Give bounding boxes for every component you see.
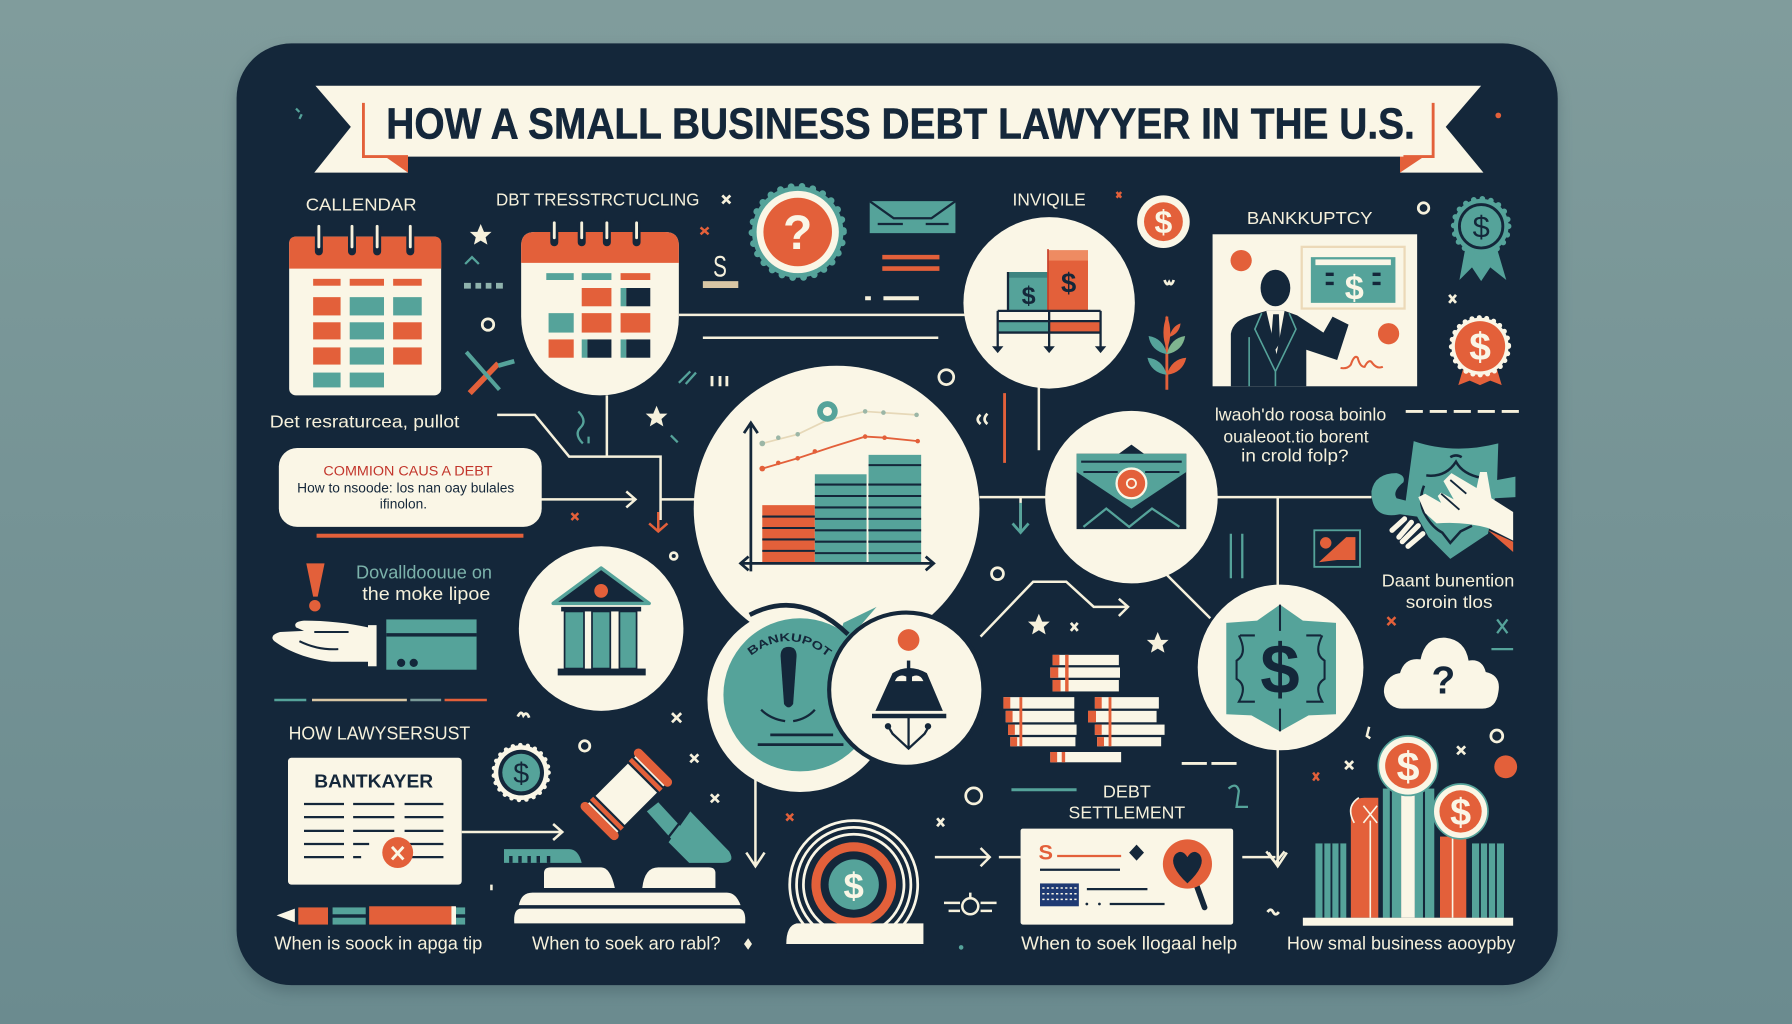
icon: envelope circle <box>1045 411 1218 583</box>
text: debt business note <box>1382 570 1514 612</box>
label: debt settlement <box>1069 782 1186 822</box>
panel: bankruptcy lawyer card: BANTKAYER <box>314 770 433 791</box>
title: HOW A SMALL BUSINESS DEBT LAWYYER IN THE U.S. <box>386 100 1415 148</box>
panel: settlement card: S <box>1038 839 1053 864</box>
panel: bankruptcy card: $ <box>1345 269 1364 307</box>
icon: bar chart with coins: $ <box>1397 744 1420 790</box>
icon: pen <box>277 906 465 925</box>
divider <box>274 699 306 701</box>
icon: orange down arrow <box>649 512 667 531</box>
text: legal help question: lwaoh'do roosa boinlo <box>1215 405 1386 425</box>
panel: bankruptcy card <box>1213 234 1417 386</box>
label: invoice: INVIQILE <box>1013 190 1086 210</box>
icon: dollar coin <box>1137 195 1190 248</box>
icon: hand with card <box>272 619 477 670</box>
text: debt restructuring note: Det resraturcea, pullot <box>270 411 460 431</box>
icon: envelope <box>870 201 955 233</box>
label: debt restructuring: DBT TRESSTRCTUCLING <box>496 190 699 210</box>
icon: central chart circle <box>694 366 979 651</box>
icon: orange rosette: $ <box>1469 326 1491 369</box>
icon: puzzle and hands <box>1371 441 1515 559</box>
text: when to seek help 1: When is soock in apga tip <box>274 933 482 954</box>
icon: teal seal <box>494 745 549 800</box>
icon: teal down arrow <box>1013 503 1029 533</box>
icon: invoice circle: $ <box>1022 282 1036 310</box>
icon: bank circle <box>519 546 683 711</box>
text: how small business apply: How smal business aooypby <box>1287 933 1516 954</box>
callout: common cause <box>279 448 542 527</box>
label: debt settlement: SETTLEMENT <box>1069 802 1186 822</box>
panel: bankruptcy lawyer card <box>288 758 462 885</box>
decorative orange lines <box>882 257 939 269</box>
icon: dollar note: S <box>713 251 727 284</box>
panel: settlement card <box>1021 829 1233 925</box>
icon: ruler block <box>504 849 582 863</box>
icon: teal rosette: $ <box>1473 210 1490 245</box>
connector lines <box>462 315 1371 866</box>
icon: gavel base <box>514 867 745 923</box>
label: bankruptcy: BANKKUPTCY <box>1247 208 1373 228</box>
icon: orange rosette <box>1451 318 1509 385</box>
icon: winged emblem <box>944 893 997 914</box>
callout: common cause: ifinolon. <box>380 497 427 512</box>
icon: small framed sketch <box>1314 530 1360 567</box>
title ribbon <box>314 86 1483 173</box>
icon: calendar 2 <box>521 223 679 395</box>
icon: bar chart with coins: $ <box>1450 791 1471 833</box>
icon: invoice circle <box>963 217 1135 389</box>
panel: main board <box>237 43 1558 985</box>
text: downloads note: Dovalldoouue on <box>356 561 492 582</box>
text: debt business note: soroin tlos <box>1406 592 1493 612</box>
dashes and settlement heading <box>1182 762 1237 765</box>
text: downloads note <box>356 561 492 604</box>
icon: bell circle <box>829 613 983 767</box>
callout: common cause: COMMION CAUS A DEBT <box>323 463 493 478</box>
icon: dollar shield circle: $ <box>1260 631 1300 710</box>
icon: gavel <box>579 747 731 863</box>
icon: dollar note <box>703 251 738 288</box>
icon: invoice circle: $ <box>1061 268 1076 299</box>
icon: dollar stacks <box>1003 655 1165 762</box>
text: debt business note: Daant bunention <box>1382 570 1514 590</box>
text: legal help question: oualeoot.tio borent <box>1223 426 1369 446</box>
icon: warning mark <box>306 563 325 611</box>
label: calendar: CALLENDAR <box>306 194 417 214</box>
icon: bankruptcy teal circle <box>707 602 876 792</box>
text: when to seek help 2: When to soek aro rabl? <box>532 933 721 954</box>
icon: question seal: ? <box>783 207 812 260</box>
icon: teal rosette <box>1454 199 1509 281</box>
icon: calendar 1 <box>289 226 441 395</box>
text: when to seek legal help: When to soek llogaal help <box>1021 933 1237 954</box>
decorative marks <box>296 109 1517 950</box>
label: how lawyers assist: HOW LAWYSERSUST <box>289 722 470 743</box>
label: debt settlement: DEBT <box>1103 782 1151 802</box>
icon: cloud question <box>1384 638 1499 709</box>
icon: bar chart with coins <box>1303 736 1513 926</box>
icon: bankruptcy teal circle: BANKUPOT <box>747 633 832 656</box>
icon: teal seal: $ <box>513 758 529 790</box>
icon: plant <box>1147 315 1186 390</box>
callout: common cause: How to nsoode: los nan oay bulales <box>297 481 514 496</box>
icon: dollar shield circle <box>1198 585 1363 750</box>
icon: lawyer figure <box>1231 270 1349 386</box>
icon: cloud question: ? <box>1432 660 1455 703</box>
text: legal help question <box>1215 405 1386 466</box>
icon: dollar rainbow: $ <box>844 865 864 906</box>
icon: dollar rainbow <box>786 821 923 953</box>
icon: question seal <box>752 186 843 278</box>
text: legal help question: in crold folp? <box>1241 446 1349 466</box>
text: downloads note: the moke lipoe <box>362 583 490 604</box>
icon: dollar coin: $ <box>1155 204 1173 240</box>
